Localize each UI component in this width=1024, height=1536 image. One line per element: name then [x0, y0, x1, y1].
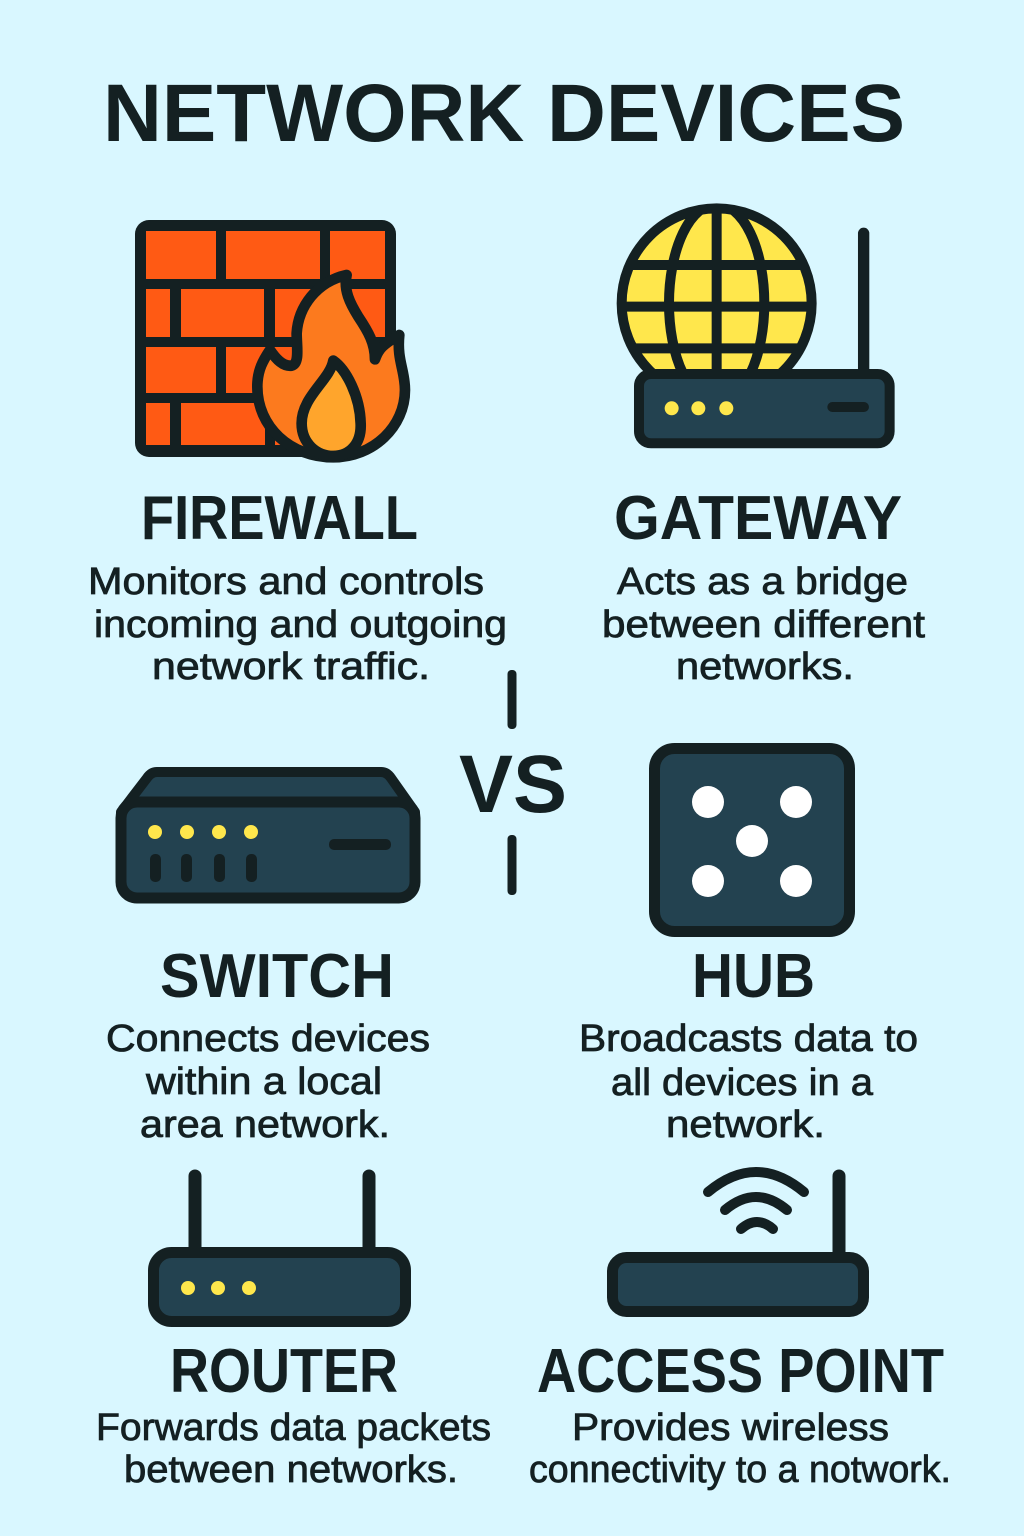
text: gateway description: between different	[602, 604, 925, 646]
text: router description	[96, 1407, 491, 1491]
text: hub description: network.	[666, 1104, 825, 1146]
divider: lower vs line	[508, 835, 516, 895]
heading: gateway: GATEWAY	[614, 484, 902, 553]
text: gateway description: networks.	[676, 646, 854, 688]
text: hub description: all devices in a	[611, 1062, 874, 1104]
text: firewall description: incoming and outgoing	[94, 604, 507, 646]
text: hub description	[579, 1018, 918, 1146]
icon: switch	[121, 772, 415, 898]
icon: gateway	[622, 204, 890, 443]
icon: access point	[612, 1172, 864, 1312]
heading: firewall: FIREWALL	[141, 484, 418, 553]
icon: firewall	[135, 220, 405, 457]
heading: switch: SWITCH	[160, 942, 394, 1011]
text: access point description: Provides wireless	[572, 1407, 889, 1449]
text: hub description: Broadcasts data to	[579, 1018, 918, 1060]
text: access point description	[529, 1407, 951, 1491]
heading: router: ROUTER	[170, 1337, 398, 1406]
text: switch description: Connects devices	[106, 1018, 430, 1060]
text: access point description: connectivity to a notwork.	[529, 1449, 951, 1491]
title: NETWORK DEVICES	[103, 68, 905, 159]
text: gateway description: Acts as a bridge	[617, 561, 908, 603]
vs label: VS	[459, 739, 567, 830]
heading: access point: ACCESS POINT	[537, 1337, 944, 1406]
text: gateway description	[602, 561, 925, 688]
text: switch description	[106, 1018, 430, 1146]
text: firewall description: Monitors and controls	[88, 561, 484, 603]
text: switch description: within a local	[145, 1061, 382, 1103]
text: firewall description: network traffic.	[152, 646, 430, 688]
text: router description: Forwards data packets	[96, 1407, 491, 1449]
text: firewall description	[88, 561, 507, 688]
text: switch description: area network.	[140, 1104, 390, 1146]
heading: hub: HUB	[692, 942, 815, 1011]
text: router description: between networks.	[124, 1449, 458, 1491]
icon: router	[154, 1176, 406, 1322]
divider: upper vs line	[508, 670, 516, 729]
icon: hub	[654, 748, 850, 932]
